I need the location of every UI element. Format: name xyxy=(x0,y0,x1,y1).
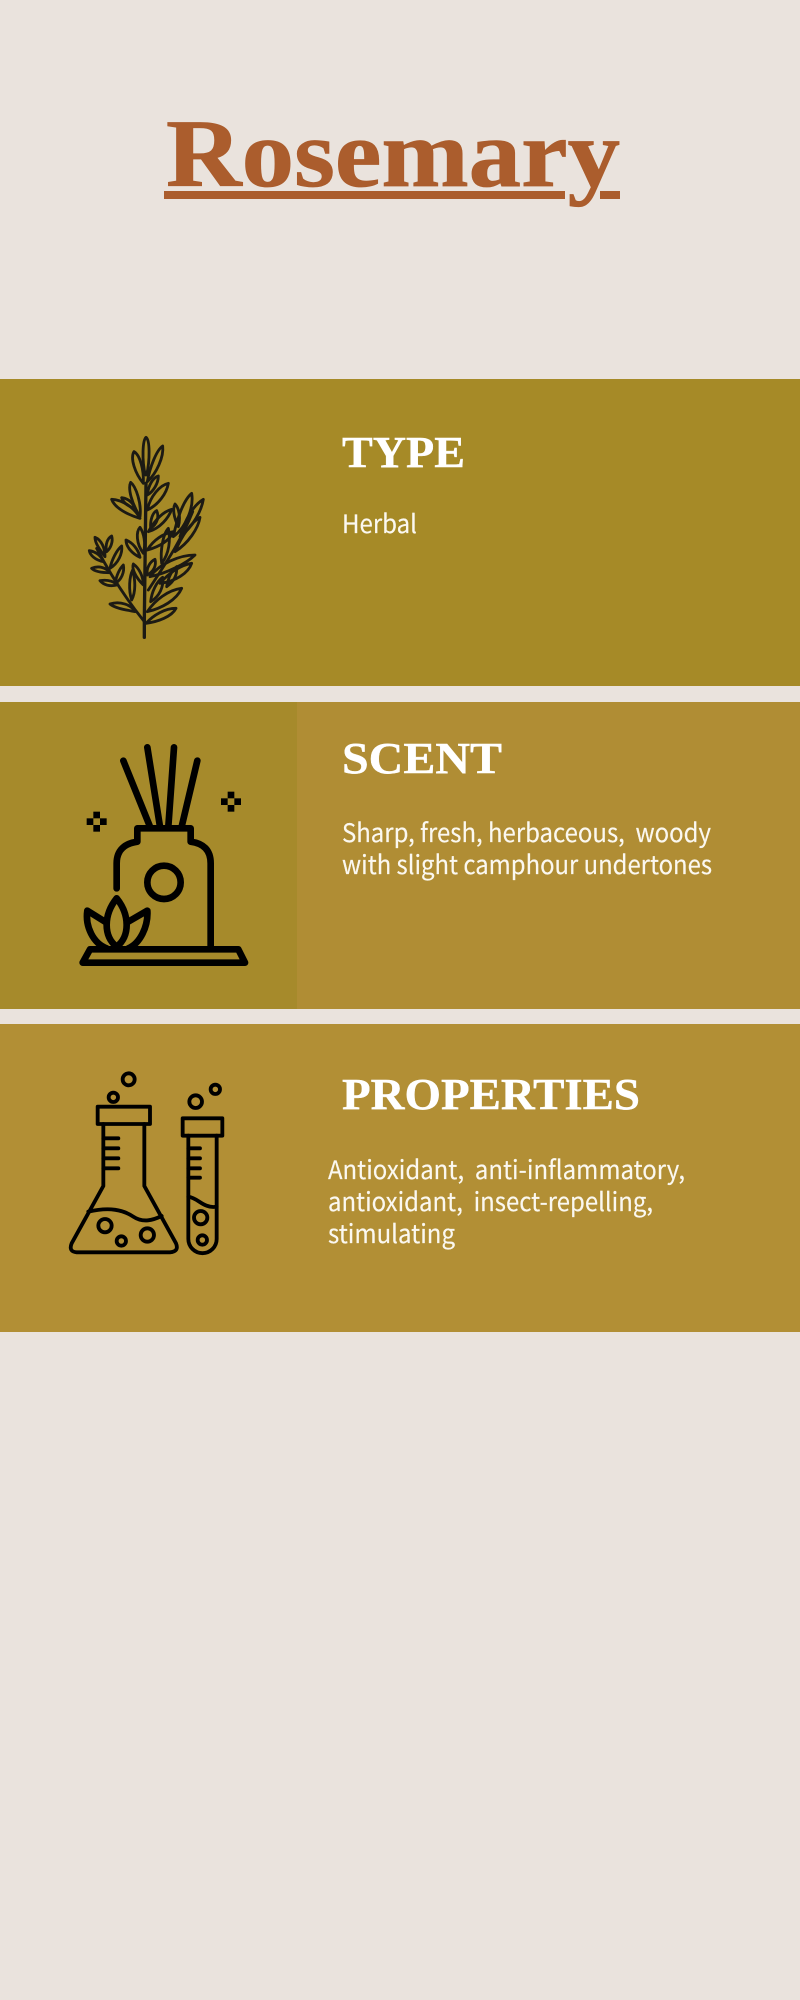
text: properties xyxy=(328,1150,685,1251)
heading: type: TYPE xyxy=(342,428,465,477)
text: properties: stimulating xyxy=(328,1214,456,1251)
panel: scent xyxy=(0,702,800,1009)
heading: scent: SCENT xyxy=(342,734,502,783)
icon: reed diffuser xyxy=(83,747,245,963)
text: type: Herbal xyxy=(342,504,417,541)
text: scent: with slight camphour undertones xyxy=(342,845,712,882)
title: Rosemary xyxy=(166,100,620,207)
icon: rosemary sprig xyxy=(89,437,203,637)
text: scent: Sharp, fresh, herbaceous, woody xyxy=(342,813,711,850)
icon: flask and test tube xyxy=(71,1073,222,1253)
panel: properties xyxy=(0,1024,800,1332)
panel: type xyxy=(0,379,800,686)
heading: properties: PROPERTIES xyxy=(342,1070,640,1119)
text: properties: antioxidant, insect-repelling, xyxy=(328,1182,653,1219)
text: properties: Antioxidant, anti-inflammatory, xyxy=(328,1150,685,1187)
text: scent xyxy=(342,813,712,882)
